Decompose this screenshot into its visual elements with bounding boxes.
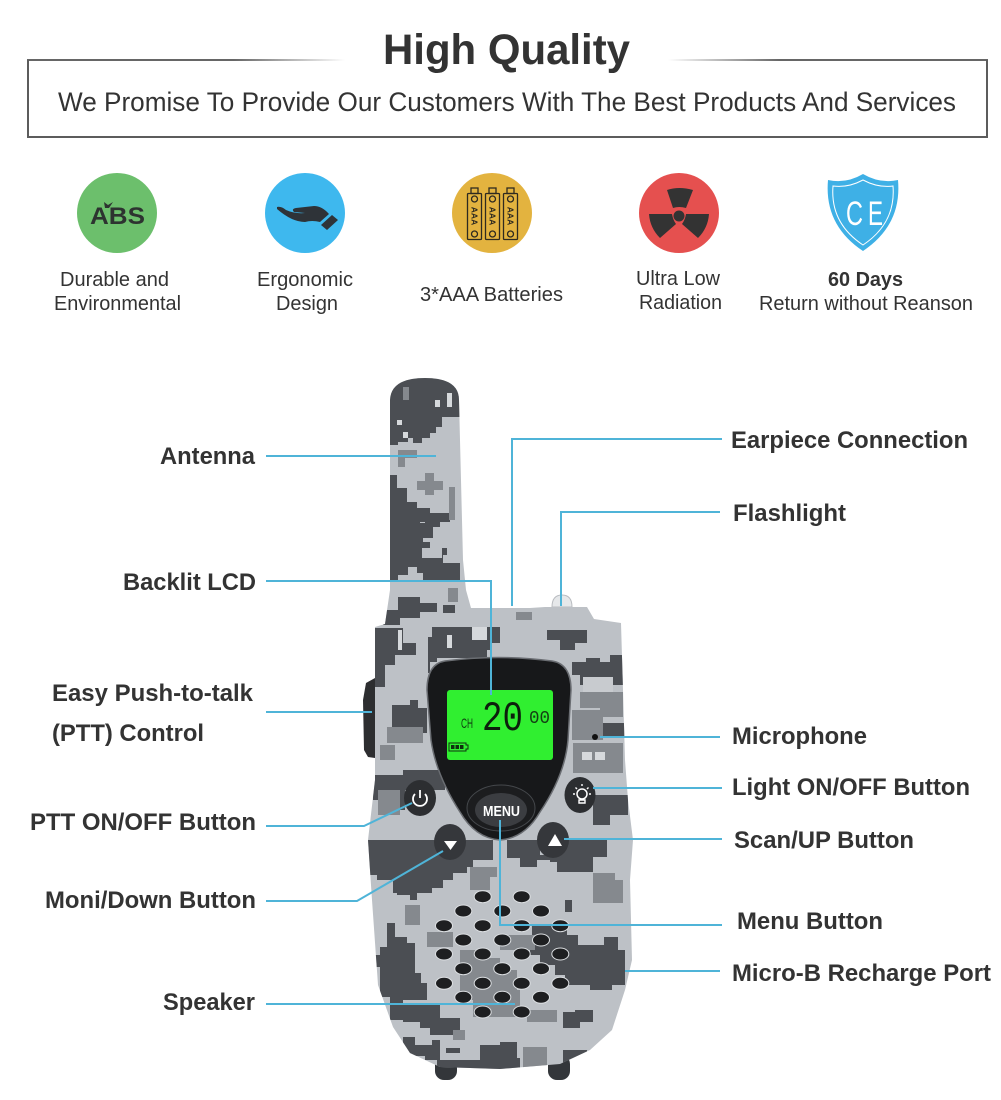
title: High Quality — [383, 26, 630, 74]
callout: moni/down: Moni/Down Button — [45, 887, 256, 914]
callout: PTT on/off: PTT ON/OFF Button — [30, 809, 256, 836]
up button — [537, 822, 569, 858]
icon: CE shield: C — [846, 195, 863, 233]
flashlight dome — [552, 595, 572, 607]
camouflage body — [360, 370, 640, 1080]
icon: batteries: AAA — [506, 207, 516, 225]
icon: ABS: ABS — [90, 203, 145, 230]
callout: antenna: Antenna — [160, 443, 255, 470]
callout: push-to-talk control: Easy Push-to-talk — [52, 680, 253, 707]
icon: CE shield: E — [868, 195, 883, 233]
icon: batteries: AAA — [470, 207, 480, 225]
LCD display — [447, 690, 553, 760]
menu button — [467, 785, 535, 831]
subtitle box: We Promise To Provide Our Customers With The Best Products And Services — [58, 87, 956, 117]
radio feet — [435, 1055, 570, 1080]
callout: push-to-talk control: (PTT) Control — [52, 720, 204, 747]
feature label: return: 60 Days — [828, 268, 903, 291]
feature label: durable: Durable and — [60, 268, 169, 291]
feature label: ergonomic — [257, 268, 353, 315]
callout: scan/up: Scan/UP Button — [734, 827, 914, 854]
down button — [434, 824, 466, 860]
speaker holes — [436, 891, 569, 1018]
callout: flashlight — [561, 500, 846, 606]
screen bezel — [427, 658, 571, 840]
feature label: ergonomic: Design — [276, 292, 338, 315]
callout: micro-B port: Micro-B Recharge Port — [732, 960, 991, 987]
callout: earpiece connection — [512, 427, 968, 606]
side PTT button — [363, 678, 375, 758]
feature label: radiation: Ultra Low — [636, 267, 720, 290]
feature label: radiation — [636, 267, 722, 314]
icon: hand — [265, 173, 345, 253]
callout: flashlight: Flashlight — [733, 500, 846, 527]
feature label: return — [759, 268, 973, 315]
feature label: durable: Environmental — [54, 292, 181, 315]
feature label: batteries: 3*AAA Batteries — [420, 283, 563, 306]
digits: 20 — [482, 695, 523, 743]
callout: speaker: Speaker — [163, 989, 255, 1016]
icon: ABS — [77, 173, 157, 253]
menu button: MENU — [483, 803, 520, 820]
walkie talkie — [360, 370, 640, 1080]
power button — [404, 780, 436, 816]
callout: push-to-talk control — [52, 680, 372, 747]
LCD display: CH — [461, 715, 473, 731]
light button — [564, 777, 596, 813]
icon: batteries — [452, 173, 532, 253]
callout: PTT on/off — [30, 803, 412, 836]
callout: earpiece connection: Earpiece Connection — [731, 427, 968, 454]
feature label: ergonomic: Ergonomic — [257, 268, 353, 291]
callout: backlit LCD: Backlit LCD — [123, 569, 256, 596]
callout: menu — [500, 820, 883, 935]
callout: menu: Menu Button — [737, 908, 883, 935]
icon: radiation — [639, 173, 719, 253]
battery indicator — [449, 743, 468, 751]
feature label: durable — [54, 268, 181, 315]
feature label: radiation: Radiation — [639, 291, 722, 314]
callout: backlit LCD — [123, 569, 491, 695]
feature label: return: Return without Reanson — [759, 292, 973, 315]
callout: moni/down — [45, 851, 443, 914]
icon: CE shield — [828, 174, 898, 251]
callout: light on/off: Light ON/OFF Button — [732, 774, 970, 801]
LCD display: 00 — [529, 709, 550, 729]
subtitle box — [27, 59, 988, 137]
callout: microphone: Microphone — [732, 723, 867, 750]
icon: batteries: AAA — [488, 207, 498, 225]
microphone hole — [592, 734, 598, 740]
